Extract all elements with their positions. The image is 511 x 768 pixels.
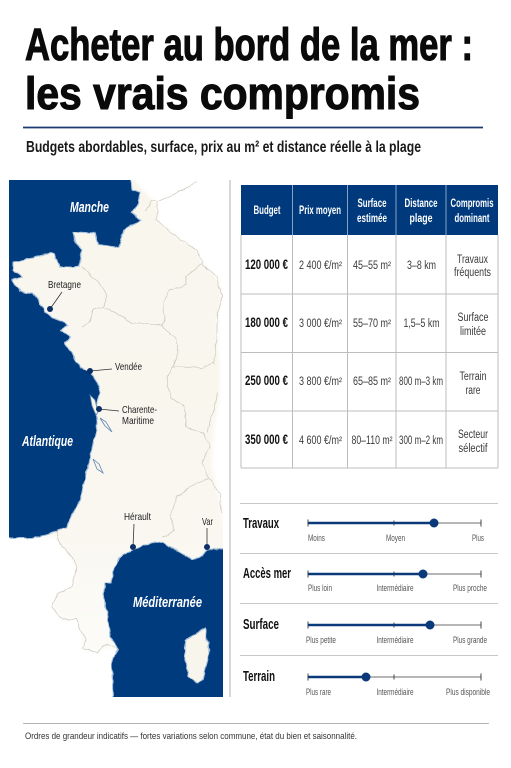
slider: Travaux: Plus (472, 533, 484, 543)
slider: Surface: Plus petite (306, 635, 336, 645)
slider: Acces mer (243, 566, 487, 593)
footnote: Ordres de grandeur indicatifs — fortes variations selon commune, état du bien et saisonnalité. (25, 731, 357, 742)
marker: Var (202, 516, 213, 550)
slider: Terrain (243, 669, 490, 697)
marker: Charente-Maritime: Maritime (122, 415, 154, 427)
row: 180 000 euros: 1,5–5 km (404, 318, 440, 330)
row: 120 000 euros: 3–8 km (407, 260, 436, 272)
marker: Herault: Hérault (124, 511, 151, 523)
slider: Travaux (243, 516, 484, 543)
row: 250 000 euros: 3 800 €/m² (299, 376, 342, 388)
row: 120 000 euros: 120 000 € (245, 256, 288, 272)
marker: Vendee (87, 362, 142, 374)
row: 180 000 euros: 180 000 € (245, 314, 288, 330)
row: 120 000 euros (245, 254, 491, 279)
panel: trade-off sliders (240, 504, 498, 697)
slider: Surface: Surface (243, 617, 279, 633)
marker: Bretagne (47, 279, 81, 312)
row: 350 000 euros: sélectif (458, 443, 488, 455)
table header: plage (410, 211, 433, 225)
islands and estuaries (90, 395, 112, 473)
panel: map of France (9, 180, 223, 697)
internal region borders (52, 182, 222, 652)
land (13, 180, 223, 629)
table header: estimée (357, 211, 387, 225)
slider: Terrain: Plus rare (306, 687, 331, 697)
marker: Bretagne: Bretagne (48, 279, 81, 291)
row: 250 000 euros: 800 m–3 km (399, 376, 443, 388)
row: 350 000 euros: Secteur (458, 429, 488, 441)
sea: Manche and Atlantique (0, 172, 140, 538)
marker: Var: Var (202, 516, 213, 528)
row: 120 000 euros: 45–55 m² (353, 260, 391, 272)
slider: Travaux: Moyen (386, 533, 405, 543)
row: 120 000 euros: fréquents (454, 267, 491, 279)
slider: Surface (243, 617, 487, 645)
slider: Terrain: Intermédiaire (376, 687, 414, 697)
slider: Acces mer: Plus loin (308, 583, 332, 593)
slider: Terrain: Terrain (243, 669, 275, 685)
title (25, 19, 473, 119)
row: 250 000 euros: rare (466, 385, 480, 397)
sea label: Mediterranee: Méditerranée (133, 595, 202, 611)
sea: Mediterranee (102, 542, 223, 697)
row: 180 000 euros (245, 312, 488, 338)
table header: Surface (358, 196, 387, 210)
sea label: Atlantique: Atlantique (21, 434, 73, 450)
row: 250 000 euros (245, 371, 486, 397)
row: 120 000 euros: 2 400 €/m² (299, 260, 342, 272)
row: 180 000 euros: limitée (460, 326, 486, 338)
row: 350 000 euros: 350 000 € (245, 431, 288, 447)
marker: Vendee: Vendée (115, 361, 142, 373)
row: 250 000 euros: 65–85 m² (353, 376, 391, 388)
table header: dominant (454, 211, 490, 225)
slider: Acces mer: Plus proche (453, 583, 487, 593)
comparison table (241, 185, 498, 468)
slider: Travaux: Travaux (243, 516, 279, 532)
marker: Charente-Maritime (96, 406, 157, 424)
slider: Acces mer: Intermédiaire (376, 583, 414, 593)
table header: Budget (254, 203, 281, 217)
slider: Surface: Intermédiaire (376, 635, 414, 645)
icon: Corsica (185, 628, 209, 683)
marker: Herault (124, 511, 151, 550)
slider: Terrain: Plus disponible (446, 687, 490, 697)
row: 180 000 euros: Surface (458, 312, 488, 324)
row: 180 000 euros: 55–70 m² (353, 318, 391, 330)
table header: Distance (404, 196, 438, 210)
sea label: Manche: Manche (70, 200, 109, 216)
row: 250 000 euros: 250 000 € (245, 372, 288, 388)
row: 350 000 euros: 80–110 m² (352, 435, 393, 447)
slider: Travaux: Moins (308, 533, 325, 543)
slider: Acces mer: Accès mer (243, 566, 291, 582)
row: 350 000 euros (245, 429, 488, 455)
table header: Prix moyen (299, 203, 341, 217)
row: 250 000 euros: Terrain (460, 371, 486, 383)
row: 350 000 euros: 300 m–2 km (399, 435, 443, 447)
table header (241, 185, 498, 235)
slider: Surface: Plus grande (453, 635, 487, 645)
marker: Charente-Maritime: Charente- (122, 404, 157, 416)
row: 350 000 euros: 4 600 €/m² (299, 435, 342, 447)
row: 180 000 euros: 3 000 €/m² (299, 318, 342, 330)
row: 120 000 euros: Travaux (457, 254, 488, 266)
title: les vrais compromis (25, 68, 420, 119)
